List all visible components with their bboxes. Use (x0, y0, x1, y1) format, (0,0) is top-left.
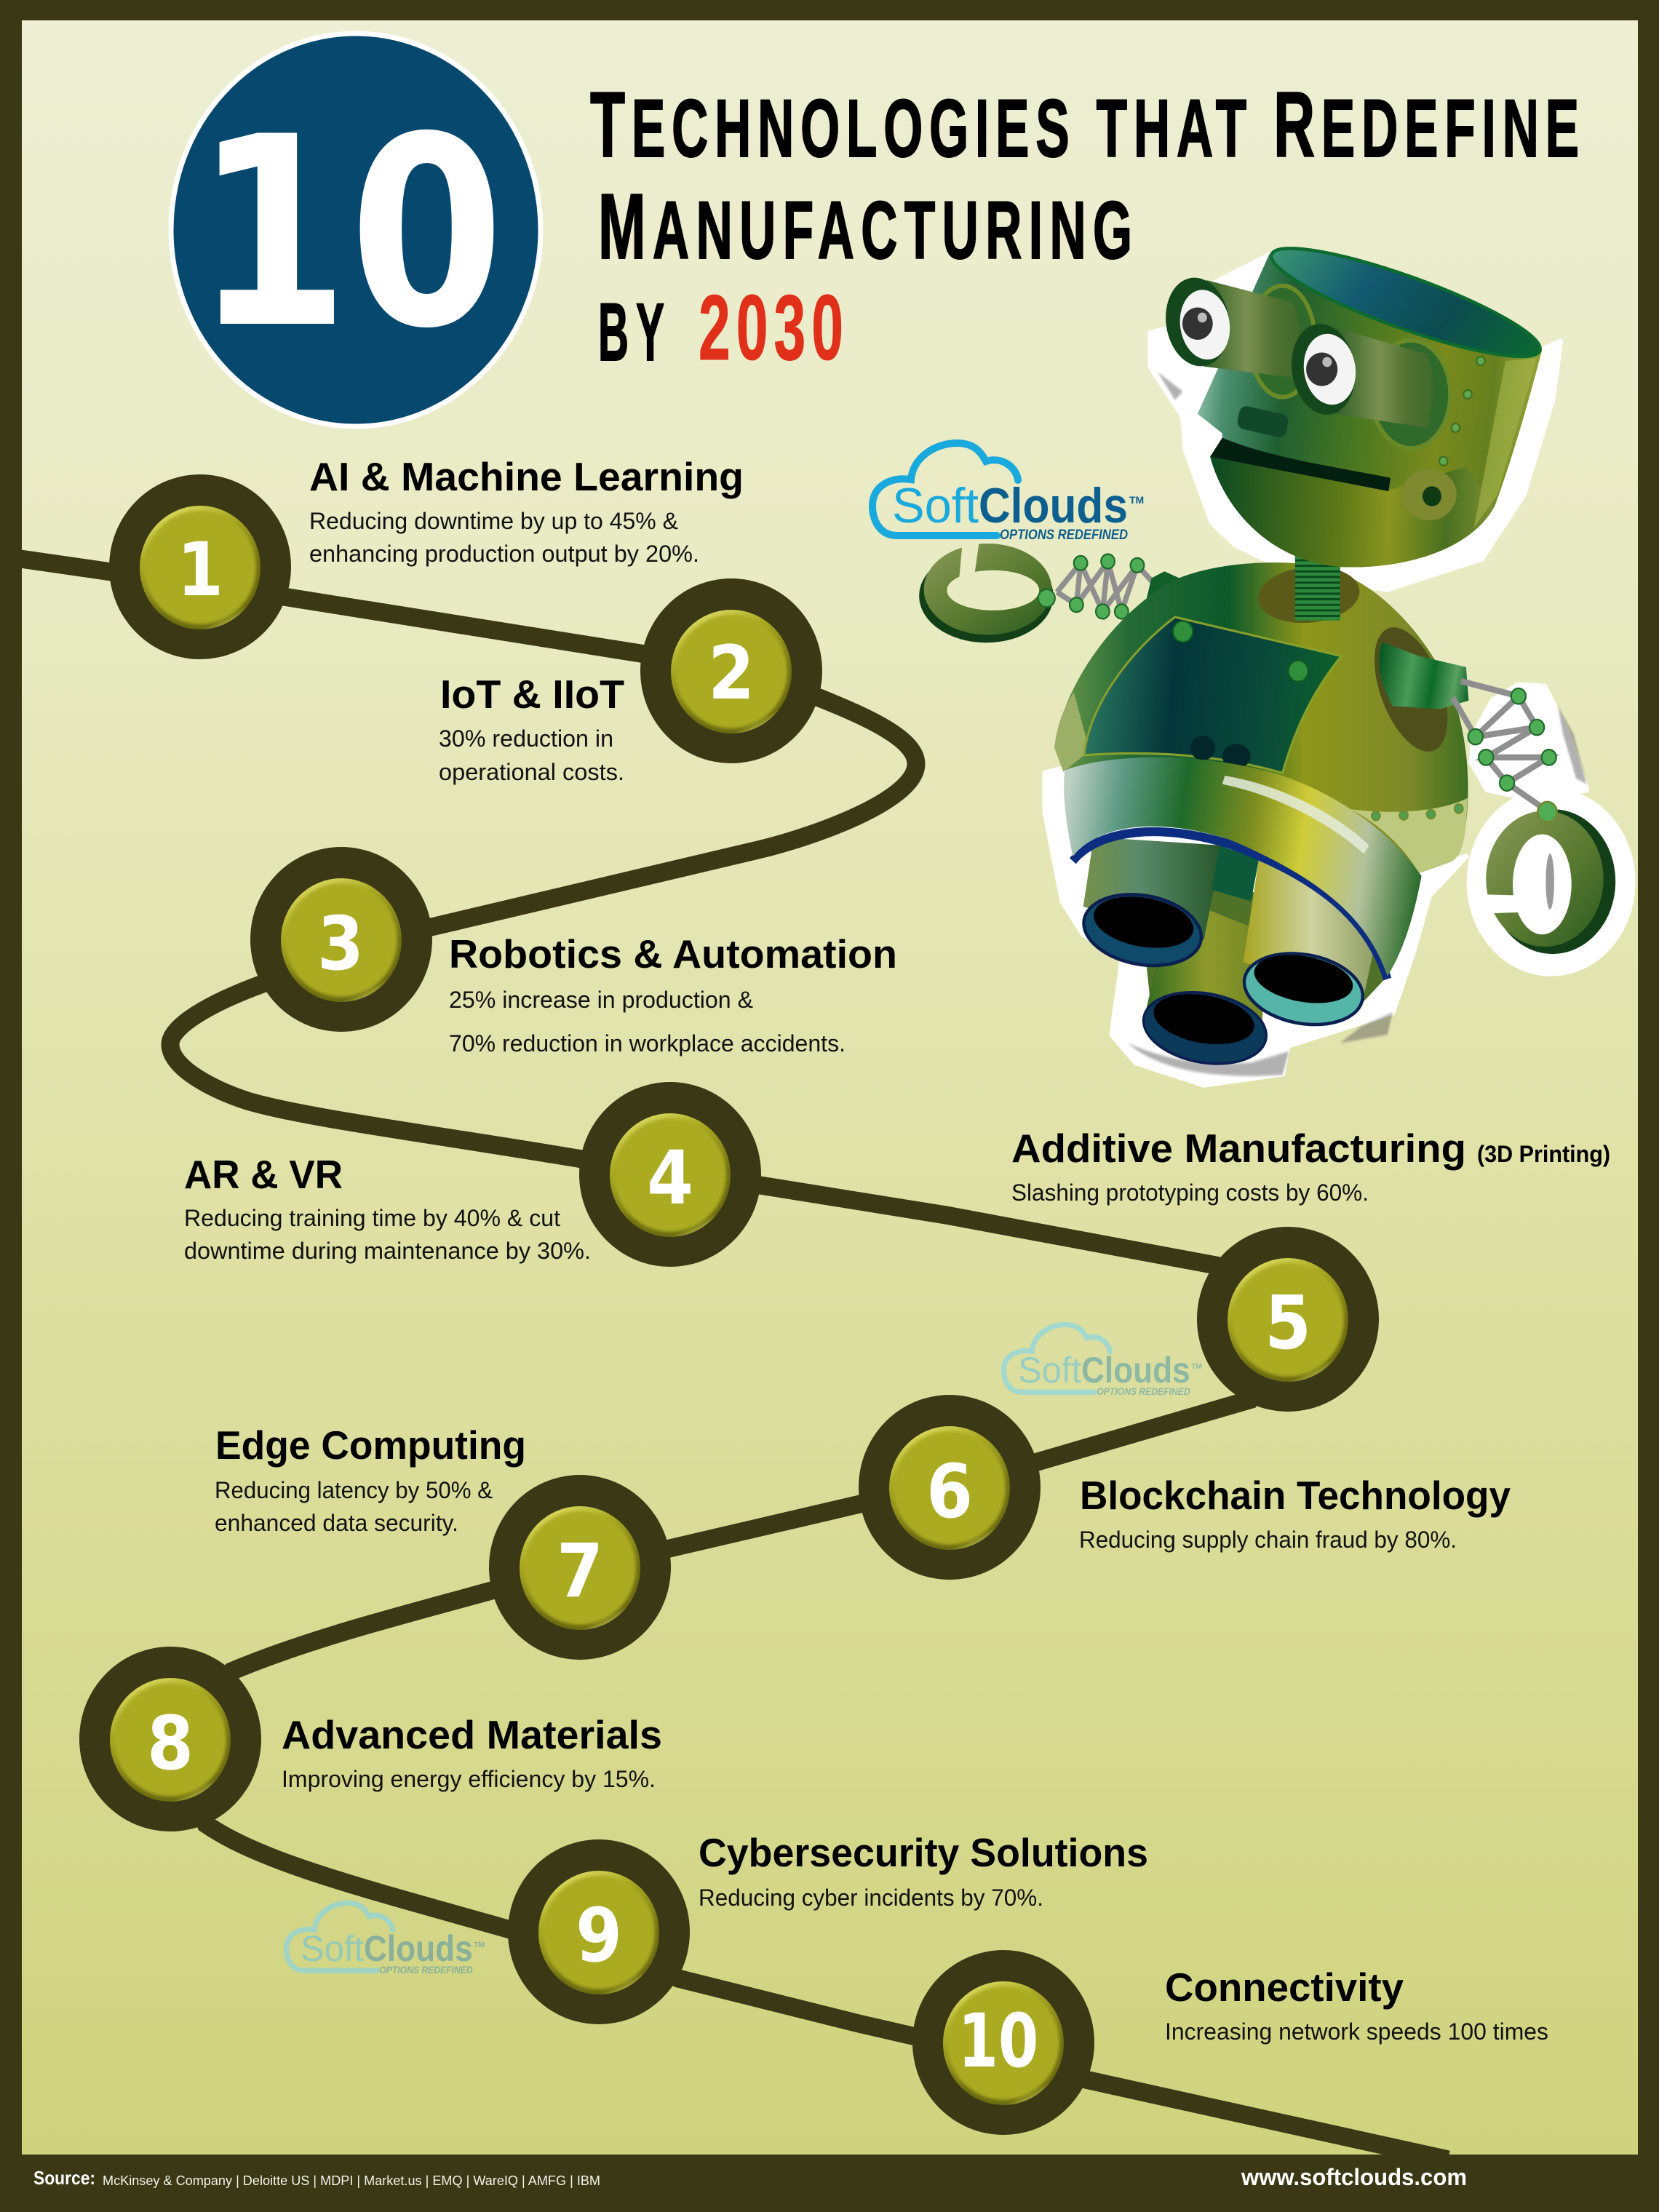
watermark logo near step 5: TM (1191, 1363, 1202, 1371)
step 4 (184, 1082, 761, 1267)
step 4 description: Reducing training time by 40% & cut (184, 1205, 560, 1231)
logo tagline: OPTIONS REDEFINED (1000, 528, 1128, 543)
robot lower light band (1350, 798, 1468, 873)
step 9 description: Reducing cyber incidents by 70%. (699, 1885, 1043, 1911)
robot left eye (1159, 272, 1300, 378)
step 2 description: 30% reduction in (439, 725, 613, 752)
step 9 node: 9 (576, 1892, 622, 1978)
logo cloud (872, 443, 1018, 536)
step 9 (508, 1830, 1148, 2024)
robot illustration (919, 230, 1633, 1085)
robot head side stripe (1474, 358, 1537, 528)
robot right eye (1285, 319, 1433, 428)
robot left hand ring (919, 540, 1054, 642)
robot head (1198, 230, 1548, 568)
robot center block (1212, 846, 1259, 901)
robot blue rim (1073, 832, 1388, 979)
step 4 heading: AR & VR (184, 1152, 343, 1197)
robot sticker shadows (1128, 372, 1587, 1076)
step 9 node (508, 1839, 690, 2024)
step 5 (1011, 1126, 1610, 1412)
step 4 node (579, 1082, 761, 1267)
step 1 description: Reducing downtime by up to 45% & (309, 508, 678, 534)
robot head rivets (1439, 357, 1485, 466)
robot jaw (1210, 457, 1495, 568)
robot head rim (1264, 230, 1548, 375)
step 2 description: operational costs. (439, 759, 624, 785)
step 7 description: Reducing latency by 50% & (215, 1477, 493, 1503)
step 3 node: 3 (317, 900, 364, 987)
step 8 description: Improving energy efficiency by 15%. (282, 1766, 656, 1792)
step 3 (250, 847, 897, 1057)
title year: 2030 (699, 276, 843, 380)
robot tube 1 (1079, 837, 1222, 974)
step 5 description: Slashing prototyping costs by 60%. (1011, 1179, 1369, 1206)
step 6 node (859, 1395, 1041, 1580)
step 4 description: downtime during maintenance by 30%. (184, 1238, 591, 1264)
step 7 description (215, 1477, 493, 1536)
robot neck (1256, 550, 1361, 627)
robot sticker outline (1045, 255, 1633, 1085)
step 6 (859, 1395, 1511, 1580)
step 2 heading: IoT & IIoT (440, 672, 624, 717)
title line 1: TECHNOLOGIES THAT REDEFINE (590, 73, 1579, 177)
step 10 node: 10 (958, 1997, 1038, 2085)
SoftClouds logo (872, 443, 1144, 543)
step 8 heading: Advanced Materials (282, 1712, 662, 1757)
title line 2: MANUFACTURING (598, 175, 1132, 279)
watermark logo near step 9 (286, 1903, 485, 1976)
step 2 (439, 578, 822, 785)
winding road connecting steps (20, 559, 1448, 2160)
footer source list (33, 2167, 600, 2189)
watermark logo near step 9: OPTIONS REDEFINED (379, 1964, 473, 1976)
step 5 heading: Additive Manufacturing (1011, 1126, 1466, 1171)
robot tube 3 (1139, 896, 1271, 1073)
step 7 (215, 1423, 671, 1660)
watermark logo near step 5 (1003, 1324, 1202, 1397)
step 3 description: 25% increase in production & (449, 987, 753, 1013)
step 5 heading: (3D Printing) (1477, 1141, 1610, 1167)
watermark logo near step 5: OPTIONS REDEFINED (1097, 1385, 1190, 1397)
watermark logo near step 9: Soft (301, 1928, 364, 1969)
step 2 node (640, 578, 822, 763)
step 6 heading: Blockchain Technology (1080, 1473, 1511, 1518)
step 4 description (184, 1205, 591, 1264)
step 8 node (79, 1647, 261, 1831)
step 1 (109, 454, 744, 659)
step 10 (912, 1950, 1548, 2135)
step 7 description: enhanced data security. (215, 1510, 458, 1536)
step 6 node: 6 (926, 1448, 973, 1535)
robot mouth (1210, 438, 1391, 491)
robot left spring arm (1038, 554, 1185, 618)
step 1 node (109, 474, 291, 659)
watermark logo near step 5: Clouds (1081, 1350, 1190, 1391)
watermark logo near step 9: Clouds (364, 1928, 473, 1969)
step 1 node: 1 (177, 526, 223, 613)
step 1 description (309, 508, 699, 567)
step 2 node: 2 (708, 629, 755, 716)
step 8 node: 8 (147, 1700, 194, 1786)
footer source list: Source: (33, 2167, 95, 2189)
step 1 description: enhancing production output by 20%. (309, 541, 699, 567)
step 10 heading: Connectivity (1165, 1965, 1404, 2010)
robot tube backing (1089, 846, 1385, 1035)
step 3 description: 70% reduction in workplace accidents. (449, 1030, 846, 1057)
robot skirt (1064, 757, 1422, 976)
step 10 node (912, 1950, 1094, 2135)
logo trademark: TM (1129, 494, 1144, 506)
robot ear (1402, 469, 1457, 520)
step 6 description: Reducing supply chain fraud by 80%. (1079, 1527, 1457, 1553)
step 7 heading: Edge Computing (215, 1423, 526, 1468)
footer website: www.softclouds.com (1241, 2164, 1467, 2190)
badge: big number 10 (171, 33, 541, 426)
step 9 heading: Cybersecurity Solutions (699, 1830, 1148, 1875)
step 3 heading: Robotics & Automation (449, 931, 897, 976)
step 5 node: 5 (1265, 1279, 1311, 1366)
step 8 (79, 1647, 662, 1831)
robot body (1054, 562, 1468, 873)
step 5 node (1197, 1227, 1379, 1412)
badge: big number 10: 10 (194, 81, 504, 386)
logo word Soft: Soft (892, 478, 979, 533)
robot right spring arm (1453, 681, 1556, 809)
robot chest screws (1173, 621, 1308, 768)
robot tube 2 (1239, 859, 1380, 1033)
robot nose (1236, 405, 1289, 439)
logo word Clouds: Clouds (979, 478, 1128, 533)
robot right hand ring (1479, 802, 1615, 954)
robot chest panel (1084, 617, 1341, 773)
watermark logo near step 5: Soft (1018, 1350, 1081, 1391)
robot body left highlight (1054, 692, 1089, 772)
robot skirt highlight (1222, 776, 1369, 854)
step 1 heading: AI & Machine Learning (309, 454, 744, 499)
step 10 description: Increasing network speeds 100 times (1165, 2018, 1548, 2045)
robot sockets (1250, 286, 1450, 448)
step 2 description (439, 725, 624, 785)
step 7 node: 7 (557, 1527, 603, 1614)
step 4 node: 4 (647, 1134, 693, 1221)
watermark logo near step 9: TM (474, 1941, 485, 1949)
robot right arm socket (1360, 616, 1463, 763)
step 7 node (489, 1475, 671, 1660)
robot right arm cylinder (1379, 642, 1468, 709)
title (590, 73, 1579, 380)
step 3 node (250, 847, 432, 1032)
title line 3: BY (598, 286, 664, 378)
footer source list: McKinsey & Company | Deloitte US | MDPI | Market.us | EMQ | WareIQ | AMFG | IBM (103, 2173, 600, 2188)
robot band rivets (1372, 804, 1463, 820)
step 3 description (449, 987, 846, 1057)
